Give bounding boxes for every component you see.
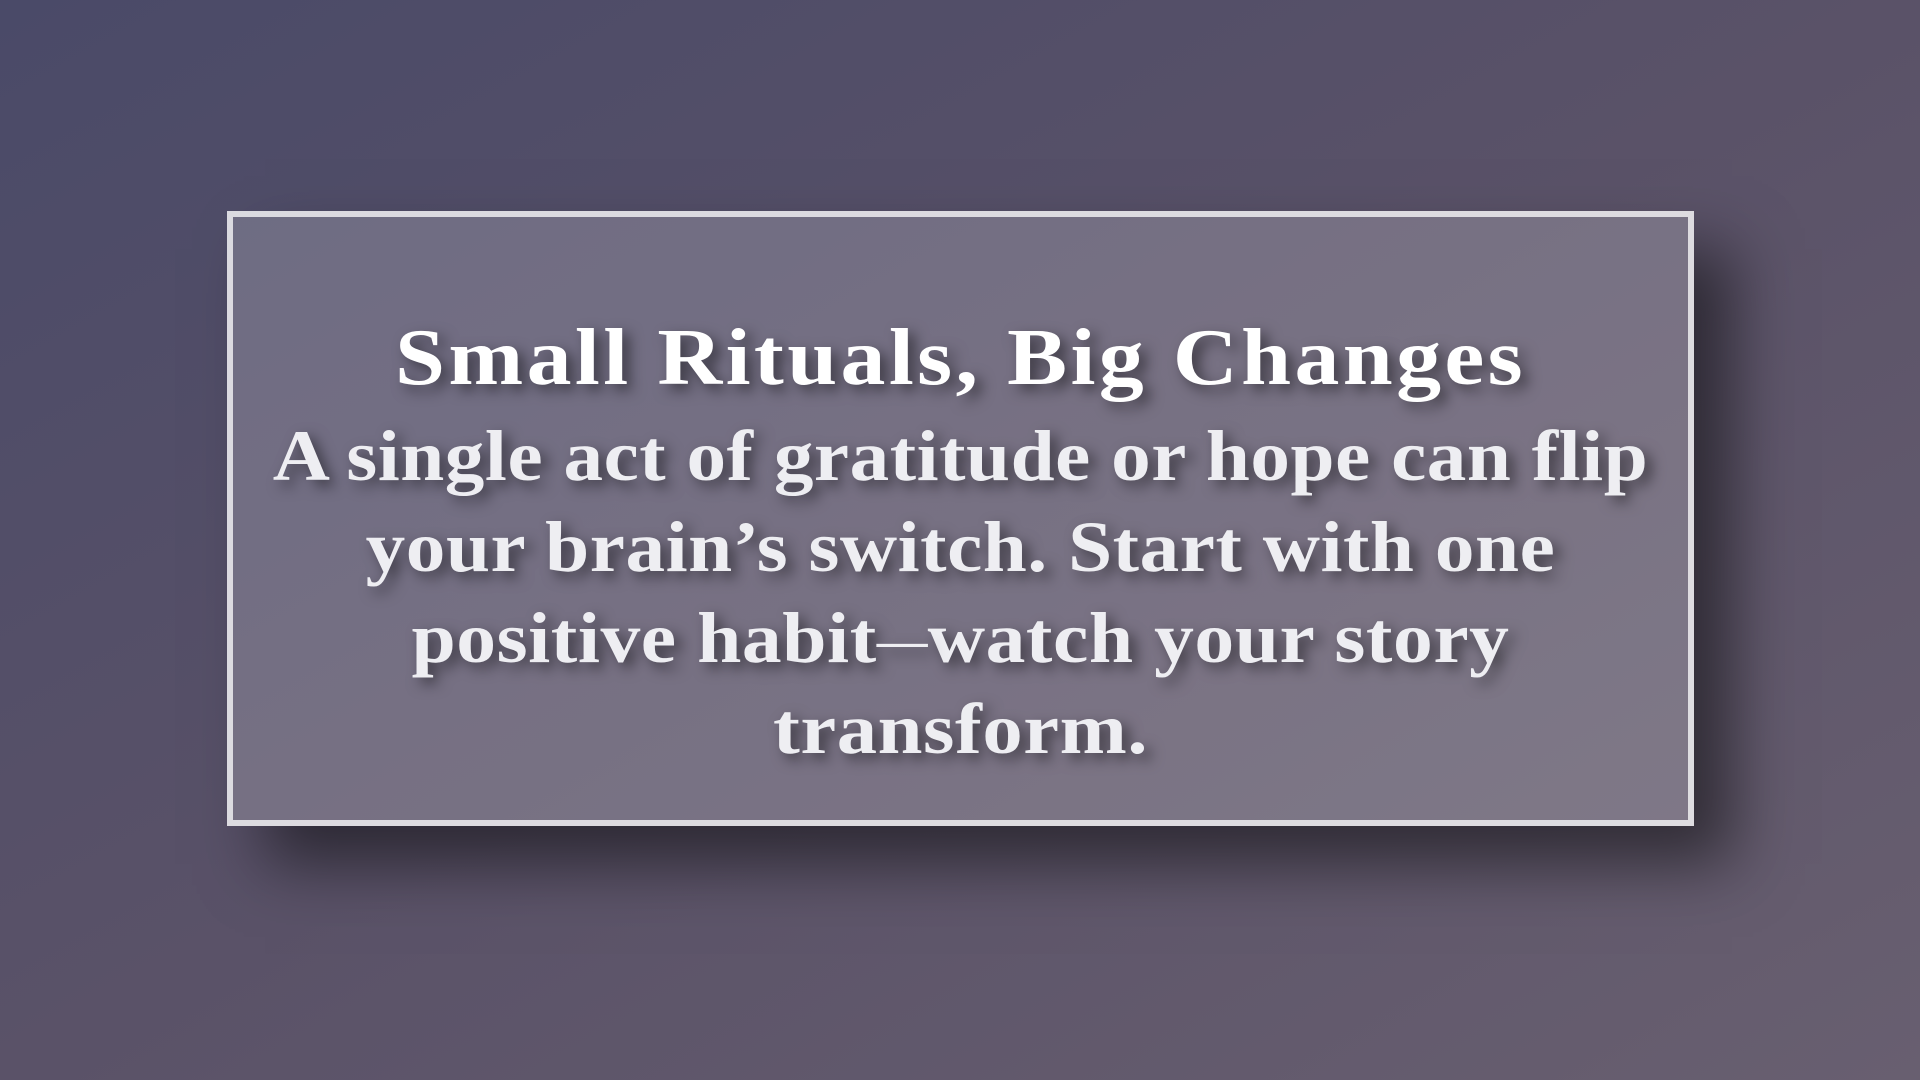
text block: message body: your brain’s switch. Start with one: [366, 507, 1555, 587]
title: Small Rituals, Big Changes: [395, 314, 1526, 402]
text block: message body: A single act of gratitude or hope can flip: [273, 416, 1648, 496]
text block: message body: transform.: [773, 689, 1148, 769]
panel: message card: [227, 211, 1694, 826]
text block: message body: [273, 416, 1658, 769]
text block: message body: positive habit—watch your story: [411, 598, 1510, 678]
